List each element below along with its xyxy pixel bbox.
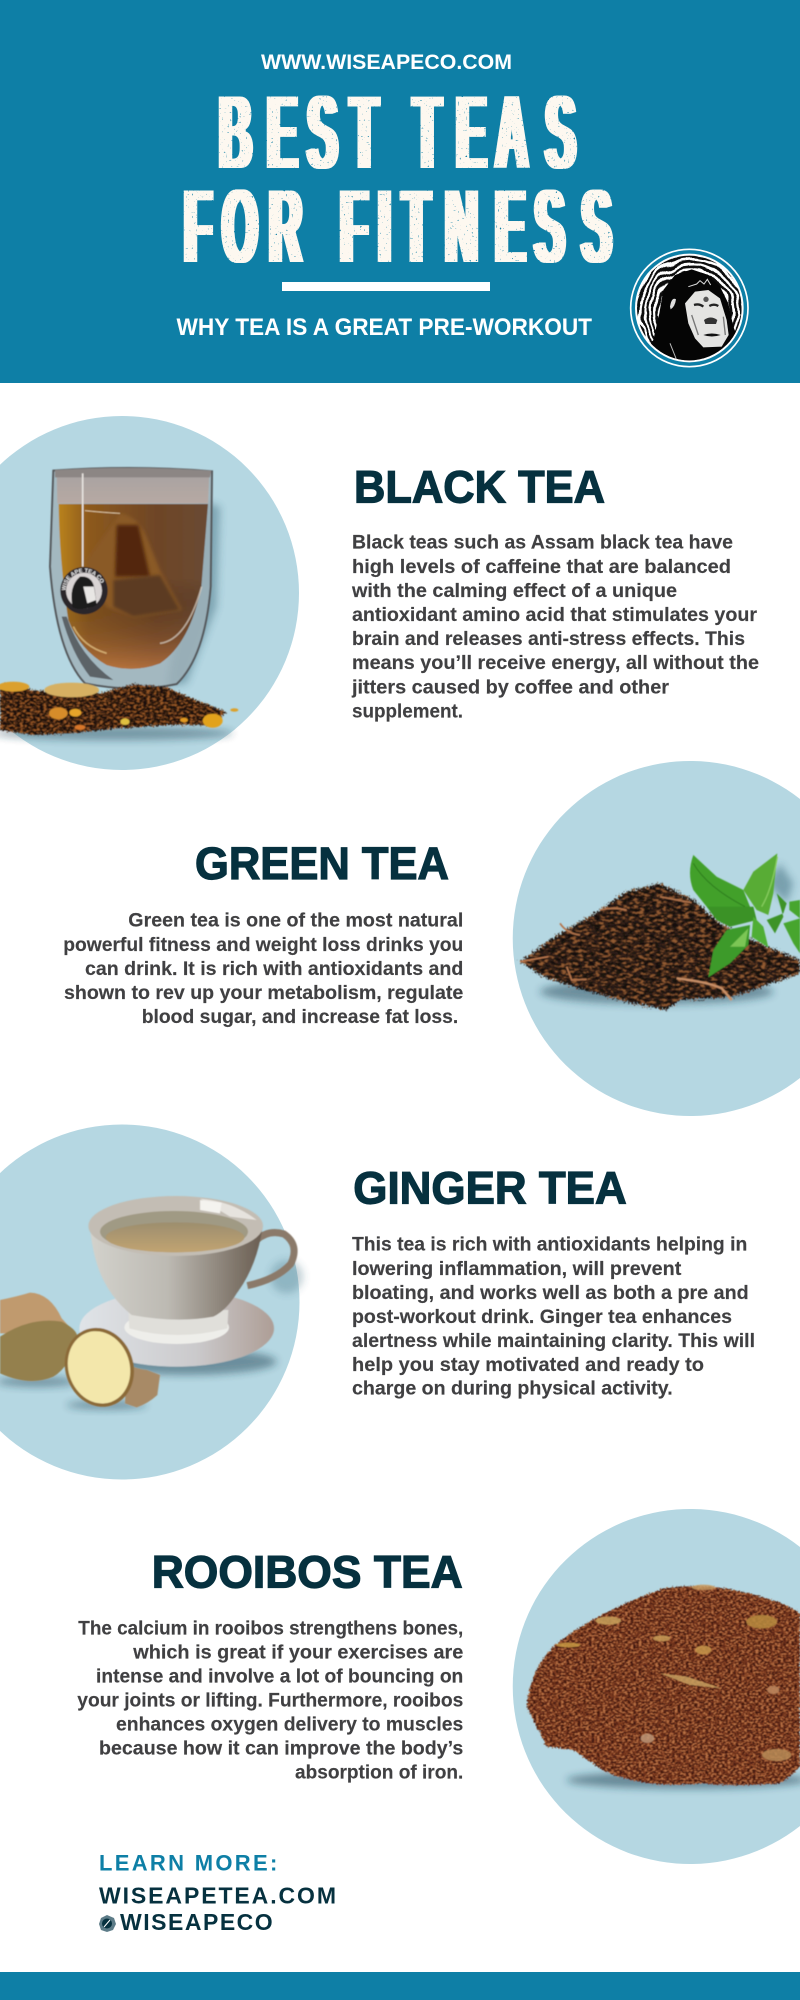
- ginger tea description: help you stay motivated and ready to: [352, 1354, 704, 1376]
- subtitle: WHY TEA IS A GREAT PRE-WORKOUT: [176, 314, 592, 341]
- green tea heading: GREEN TEA: [195, 838, 449, 889]
- ginger tea description: alertness while maintaining clarity. This will: [352, 1330, 755, 1352]
- header band: [0, 0, 800, 383]
- panel: ginger tea: [0, 1124, 755, 1480]
- title: FOR FITNESS: [184, 168, 611, 286]
- ginger tea circle: [0, 1124, 300, 1480]
- rooibos tea circle: [513, 1509, 800, 1864]
- ginger tea description: lowering inflammation, will prevent: [352, 1258, 682, 1280]
- black tea description: jitters caused by coffee and other: [351, 676, 669, 698]
- black tea description: means you’ll receive energy, all without the: [352, 652, 759, 674]
- ginger tea description: [352, 1234, 755, 1399]
- panel: green tea: [63, 761, 800, 1116]
- black tea photo illustration: glass and leaves: [0, 466, 239, 745]
- black tea description: brain and releases anti-stress effects. This: [352, 628, 745, 650]
- icon: badge: [99, 1915, 116, 1932]
- black tea circle: [0, 416, 299, 770]
- green tea photo illustration: leaves and mint: [520, 853, 800, 1010]
- black tea description: [351, 532, 759, 722]
- title: BEST TEAS: [219, 74, 575, 192]
- rooibos tea heading: ROOIBOS TEA: [152, 1547, 463, 1598]
- ginger tea description: bloating, and works well as both a pre and: [352, 1282, 749, 1304]
- title underline: [282, 282, 490, 291]
- green tea description: [63, 910, 463, 1028]
- rooibos tea description: which is great if your exercises are: [132, 1641, 463, 1663]
- black tea description: Black teas such as Assam black tea have: [352, 532, 733, 554]
- panel: rooibos tea: [77, 1509, 800, 1864]
- learn more call to action: [99, 1851, 336, 1935]
- ginger tea heading: GINGER TEA: [353, 1163, 627, 1214]
- ginger tea description: charge on during physical activity.: [352, 1377, 673, 1399]
- black tea heading: BLACK TEA: [354, 462, 605, 513]
- rooibos tea description: your joints or lifting. Furthermore, rooibos: [77, 1690, 463, 1712]
- icon: gorilla logo: [630, 248, 749, 368]
- footer band: [0, 1972, 800, 2000]
- rooibos tea description: absorption of iron.: [295, 1762, 463, 1784]
- ginger tea description: This tea is rich with antioxidants helping in: [352, 1234, 747, 1256]
- social handle: WISEAPECO: [120, 1909, 273, 1935]
- green tea description: can drink. It is rich with antioxidants and: [85, 958, 463, 980]
- green tea description: blood sugar, and increase fat loss.: [142, 1006, 458, 1028]
- website url: WWW.WISEAPECO.COM: [261, 51, 512, 74]
- ginger tea photo illustration: cup and ginger: [0, 1196, 303, 1416]
- black tea description: high levels of caffeine that are balanced: [352, 556, 731, 578]
- black tea description: antioxidant amino acid that stimulates your: [352, 604, 757, 626]
- green tea description: powerful fitness and weight loss drinks you: [63, 934, 463, 956]
- green tea description: shown to rev up your metabolism, regulate: [64, 982, 463, 1004]
- tea bag tag: [60, 566, 108, 615]
- rooibos tea description: enhances oxygen delivery to muscles: [116, 1714, 463, 1736]
- green tea description: Green tea is one of the most natural: [128, 910, 463, 932]
- rooibos tea description: [77, 1617, 463, 1784]
- learn more label: LEARN MORE:: [99, 1851, 277, 1876]
- panel: black tea: [0, 416, 759, 770]
- black tea description: supplement.: [352, 700, 463, 722]
- rooibos tea description: The calcium in rooibos strengthens bones,: [78, 1617, 463, 1639]
- rooibos tea photo illustration: leaf pile: [527, 1585, 800, 1789]
- green tea circle: [513, 761, 800, 1116]
- ginger tea description: post-workout drink. Ginger tea enhances: [352, 1306, 732, 1328]
- website address: WISEAPETEA.COM: [99, 1882, 336, 1908]
- black tea description: with the calming effect of a unique: [351, 580, 677, 602]
- tea bag tag: WISE APE TEA CO: [61, 568, 104, 591]
- rooibos tea description: because how it can improve the body’s: [99, 1738, 463, 1760]
- title: [184, 74, 611, 286]
- rooibos tea description: intense and involve a lot of bouncing on: [96, 1665, 463, 1687]
